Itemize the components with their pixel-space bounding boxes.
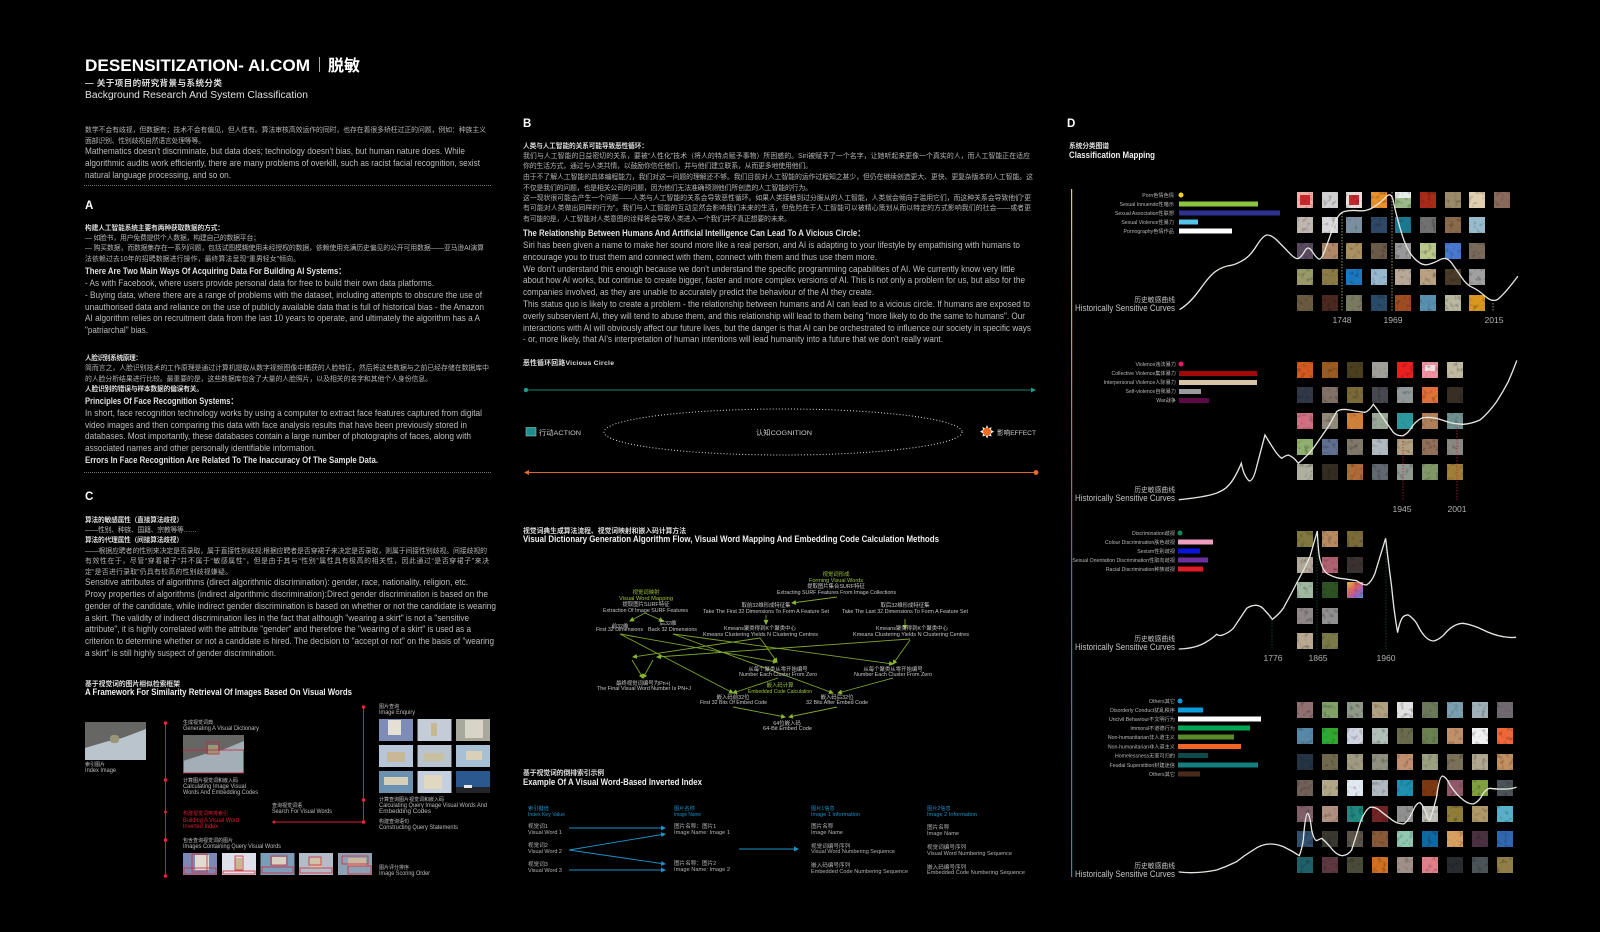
node: kmeans last: Kmeans聚类得到K个聚类中心 — [876, 624, 949, 632]
section B text: The Relationship Between Humans And Artificial Intelligence Can Lead To A Vicious Circle： — [523, 228, 865, 238]
curve: porn: Historically Sensitive Curves — [1075, 303, 1175, 313]
legend: others bars: Non-humanitarian非人道主义 — [1108, 742, 1175, 750]
curve: porn: 1969 — [1383, 315, 1403, 325]
legend: others bars: Others其它 — [1149, 770, 1175, 778]
image grid: discrimination — [1297, 531, 1363, 649]
section C text: criterion to determine whether or not a candidate is hired. The decision to "accept or not" on the basis of "wearing — [85, 636, 494, 646]
node: last 32 bits: 32 Bits After Embed Code — [806, 700, 868, 706]
face recognition text: In short, face recognition technology works by using a computer to extract face features captured from digital — [85, 408, 482, 418]
teal arrow — [524, 388, 1036, 392]
curve: porn: 历史敏感曲线 — [1134, 295, 1175, 304]
legend: discrimination bars: Colour Discrimination肤色歧视 — [1105, 538, 1175, 546]
section A text: — 如脸书，用户免费提供个人数据，构建自己的数据平台； — [85, 233, 260, 242]
curve: discrimination: 1865 — [1308, 653, 1328, 663]
node: kmeans last — [853, 624, 969, 638]
step: search for visual words: 查询视觉词语 — [272, 802, 302, 809]
face recognition text: 的人脸分析结果进行比较。最重要的是，这些数据库包含了大量的人脸照片，以及相关的名字和其他个人身份信息。 — [85, 374, 432, 383]
step: building inverted index: Building A Visual Word — [183, 817, 239, 824]
intro text: algorithmic audits work efficiently, there are many problems of overkill, such as racist facial recognition, sexist — [85, 158, 480, 168]
column: index key: 索引键值 — [528, 804, 549, 812]
curve: others: Historically Sensitive Curves — [1075, 869, 1175, 879]
heading: algorithm flow — [523, 526, 939, 544]
node: first 32 dimensions set — [703, 601, 829, 615]
column: image name: 图片名称：图片2 — [674, 859, 716, 867]
section B text: 有可能的是，人工智能对人类意图的诠释将会导致人类进入一个我们并不真正想要的未来。 — [523, 214, 791, 223]
column: image 1 information: Image 1 Information — [811, 812, 860, 818]
node: visual word mapping — [603, 588, 688, 614]
curve: discrimination: 历史敏感曲线 — [1134, 634, 1175, 643]
diagram: inverted index — [528, 804, 1025, 876]
node: first and back 32 dimensions: First 32 Dimensions — [596, 627, 643, 633]
section A text: 法依赖过去10年的招聘数据进行操作，最终算法呈现“重男轻女”倾向。 — [85, 254, 300, 263]
node: first 32 bits: First 32 Bits Of Embed Code — [700, 700, 767, 706]
heading: algorithm flow: Visual Dictionary Generation Algorithm Flow, Visual Word Mapping And Embedding Code Calculation Methods — [523, 534, 939, 544]
column: index key: Visual Word 1 — [528, 830, 562, 836]
section C text: ——性别、种族、国籍、宗教等等…… — [85, 525, 197, 534]
chart group: discrimination — [1072, 529, 1516, 663]
column: image 1 information: Visual Word Numbering Sequence — [811, 849, 895, 855]
step: search for visual words — [272, 802, 333, 815]
step: constructing query statements: Constructing Query Statements — [379, 824, 459, 831]
column: image 2 information: Visual Word Numbering Sequence — [927, 851, 1012, 857]
legend: violence bars: Interpersonal Violence人际暴力 — [1104, 378, 1176, 386]
section C text: a skirt" is still highly suspect of gender discrimination. — [85, 648, 276, 658]
step: image enquiry: Image Enquiry — [379, 709, 416, 716]
column: image name: 图片名称 — [674, 804, 695, 812]
node: first and back 32 dimensions: Back 32 Dimensions — [648, 627, 697, 633]
heading: section C: C — [85, 491, 93, 503]
node: visual word mapping: 视觉词映射 — [633, 588, 660, 596]
image grid: porn — [1297, 192, 1510, 311]
node: final visual word number: The Final Visual Word Number Is PN+J — [597, 686, 691, 692]
section A text: unauthorised data and reliance on the use of publicly available data that is full of historical bias - the Amazon — [85, 302, 484, 312]
chart group: porn — [1075, 191, 1518, 325]
legend: discrimination bars: Discrimination歧视 — [1132, 529, 1175, 537]
heading: vicious circle: 恶性循环回路Vicious Circle — [523, 358, 614, 367]
section B text: about how AI works, but continue to create bigger, faster and more complex versions of AI. This is not only a problem for us, but also for the — [523, 275, 1025, 285]
curve: violence: 1945 — [1392, 504, 1412, 514]
legend: discrimination bars — [1072, 529, 1213, 573]
column: index key: Visual Word 3 — [528, 868, 562, 874]
curve: discrimination — [1075, 531, 1516, 663]
section C text: 算法的代理属性（间接算法歧视） — [85, 535, 183, 544]
index image: Index Image — [85, 767, 116, 774]
legend: violence bars: War战争 — [1156, 396, 1176, 404]
curve: others: 历史敏感曲线 — [1134, 861, 1175, 870]
heading: classification mapping: 系统分类图谱 — [1069, 141, 1109, 150]
step: building inverted index: Inverted Index — [183, 823, 219, 830]
section A text: AI algorithm relies on recruitment data from the last 10 years to operate, and ultimately the algorithm has a A — [85, 313, 481, 323]
curve: discrimination: 1776 — [1263, 653, 1283, 663]
column: image 1 information: Embedded Code Numbering Sequence — [811, 869, 908, 875]
step: calculating query words: 计算查询图片视觉词和嵌入码 — [379, 796, 444, 803]
section B text: 我们与人工智能的日益密切的关系，要被“人性化”技术（将人的特点赋予事物）所困惑的。Siri被赋予了一个名字，让她听起来更像一个真实的人，而人工智能正在适应 — [523, 151, 1030, 160]
legend: violence bars: Violence违法暴力 — [1135, 360, 1176, 368]
face recognition text — [85, 353, 489, 465]
flow arrows — [620, 597, 910, 717]
subtitle: — 关于项目的研究背景与系统分类 — [85, 77, 222, 88]
legend: others bars — [1108, 697, 1261, 778]
legend: porn bars: Sexual Innuendo性暗示 — [1119, 200, 1174, 208]
heading: inverted index: 基于视觉词的倒排索引示例 — [523, 768, 604, 777]
index image — [85, 722, 146, 774]
intro text: 面部识别、性别歧视自然语言处理等等。 — [85, 136, 205, 145]
curve: porn: 1748 — [1332, 315, 1352, 325]
section C text: a skirt. The validity of indirect discrimination lies in the fact that although "wearing a skirt" is not a "sensitive — [85, 613, 469, 623]
node: 64 bit code: 64-Bit Embed Code — [763, 726, 812, 732]
legend: others bars: Feudal Superstition封建迷信 — [1110, 761, 1175, 769]
section B text: We don't understand this enough because we don't understand the specific programming capabilities of AI. We currently know very little — [523, 264, 1015, 274]
section B text: 你的生活方式，通过与人类共情，以鼓励你信任他们，并与他们建立联系，从而更多地使用他们。 — [523, 161, 812, 170]
step: image enquiry — [379, 703, 490, 793]
column: image 2 information: 嵌入码编号序列 — [927, 863, 967, 871]
step: calculating query words — [379, 796, 487, 815]
cognition ellipse: 认知COGNITION — [756, 428, 812, 437]
step: image enquiry: 图片查询 — [379, 703, 399, 710]
column: image name: Image Name: Image 1 — [674, 830, 730, 836]
image grid: violence — [1297, 362, 1463, 480]
intro text — [85, 125, 486, 180]
section A text: - Buying data, where there are a range of problems with the dataset, including attempts to obscure the use of — [85, 290, 482, 300]
column: image 1 information: 图片1信息 — [811, 804, 835, 812]
node: number clusters left: Number Each Cluster From Zero — [739, 672, 817, 678]
node: forming visual words: Extracting SURF Features From Image Collections — [777, 590, 896, 596]
node: visual word mapping: Extraction Of Image SURF Features — [603, 608, 688, 614]
node: first and back 32 dimensions: 后32维 — [660, 619, 677, 627]
node: number clusters left — [739, 665, 817, 678]
legend: others bars: Non-humanitarian非人道主义 — [1108, 733, 1175, 741]
node: embedded code calculation — [748, 681, 812, 695]
face recognition text: 简而言之，人脸识别技术的工作原理是通过计算机提取从数字视频图像中捕获的人脸特征，然后将这些数据与之前已经存储在数据库中 — [85, 363, 489, 372]
node: last 32 bits — [806, 693, 868, 706]
section B text: 这一现状很可能会产生一个问题——人类与人工智能的关系会导致恶性循环。如果人类接触到过分服从的人工智能，人类就会倾向于滥用它们，而这种关系会导致他们“更 — [523, 193, 1031, 202]
section A text: — 购买数据，而数据集存在一系列问题，包括试图模糊使用未经授权的数据，依赖使用充满历史偏见的公开可用数据——亚马逊AI演算 — [85, 243, 484, 252]
intro text: 数学不会有歧视，但数据有；技术不会有偏见，但人性有。算法审核高效运作的同时，也存在着很多矫枉过正的问题，例如：种族主义 — [85, 125, 486, 134]
face recognition text: associated names and other personally identifiable information. — [85, 443, 316, 453]
scoring image row — [183, 853, 431, 877]
step: calculating visual words — [183, 777, 259, 796]
node: 64 bit code: 64位嵌入码 — [773, 719, 801, 727]
curve: violence: 2001 — [1447, 504, 1467, 514]
step: calculating visual words: 计算图片视觉词和嵌入码 — [183, 777, 238, 784]
node: kmeans last: Kmeans Clustering Yields N Clustering Centres — [853, 632, 969, 638]
step: calculating visual words: Words And Embedding Codes — [183, 789, 259, 796]
heading: algorithm flow: 视觉词典生成算法流程、视觉词映射和嵌入码计算方法 — [523, 526, 686, 535]
effect label — [980, 425, 1036, 438]
legend: porn bars: Porn色情色情 — [1142, 191, 1174, 199]
curve: violence: 历史敏感曲线 — [1134, 485, 1175, 494]
section B text: 人类与人工智能的关系可能导致恶性循环： — [523, 141, 648, 150]
image grid: others — [1297, 702, 1513, 873]
section C text: 算法的敏感属性（直接算法歧视） — [85, 515, 183, 524]
red timeline left — [164, 721, 167, 878]
step: images containing query visual words — [183, 837, 282, 850]
title: DESENSITIZATION- AI.COM — [85, 57, 310, 75]
column: image 1 information — [811, 804, 908, 875]
legend: violence bars — [1104, 360, 1257, 404]
diagram: vicious circle — [524, 388, 1038, 475]
section B text: overly subservient AI, they will tend to abuse them, and this relationship will lead to them being "more likely to do the same to humans". Our — [523, 311, 1025, 321]
step: constructing query statements: 构建查询语句 — [379, 818, 409, 825]
curve: discrimination: 1960 — [1376, 653, 1396, 663]
diagram: similarity retrieval framework — [85, 703, 490, 878]
node: first 32 bits: 嵌入码前32位 — [717, 693, 750, 701]
node: kmeans first: Kmeans聚类得到K个聚类中心 — [724, 624, 797, 632]
legend: others bars: Others其它 — [1149, 697, 1175, 705]
subtitle — [85, 77, 308, 101]
legend: porn bars: Pornography色情作品 — [1124, 227, 1174, 235]
legend: others bars: Disorderly Conduct扰乱秩序 — [1110, 706, 1175, 714]
section B text: This status quo is likely to create a problem - the relationship between humans and AI can lead to a vicious circle. If humans are exposed to — [523, 299, 1030, 309]
legend: others bars: Uncivil Behaviour不文明行为 — [1109, 715, 1175, 723]
step: calculating query words: Embedding Codes — [379, 808, 432, 815]
column: image name — [674, 804, 730, 873]
section C text: attribute", it is highly correlated with the attribute "gender" and therefore the "wearing of a skirt" is used as a — [85, 624, 472, 634]
column: index key: 视觉词2 — [528, 841, 548, 849]
red query path — [272, 705, 365, 824]
node: number clusters right: 从每个聚类从零开始编号 — [863, 665, 923, 673]
column: image name: Image Name — [674, 812, 701, 818]
node: visual word mapping: Visual Word Mapping — [619, 596, 673, 602]
node: number clusters right: Number Each Cluster From Zero — [854, 672, 932, 678]
section B text: 由于不了解人工智能的具体编程能力，我们对这一问题的理解还不够。我们目前对人工智能的运作过程知之甚少，但仍在继续创造更大、更快、更复杂版本的人工智能。这 — [523, 172, 1033, 181]
node: visual word mapping: 提取图片SURF特征 — [622, 600, 670, 608]
node: first and back 32 dimensions: 前32维 — [612, 622, 629, 630]
face recognition text: databases. Most importantly, these databases contain a large number of photographs of faces, along with — [85, 431, 471, 441]
node: final visual word number — [597, 679, 691, 692]
column: index key: Index Key Value — [528, 812, 565, 818]
column: image name: Image Name: Image 2 — [674, 867, 730, 873]
node: forming visual words — [777, 570, 896, 596]
action label: 行动ACTION — [539, 428, 581, 437]
section B text: - or, more likely, that AI's interpretation of human intentions will lead humanity into a future that we don't really want. — [523, 334, 943, 344]
face recognition text: 人脸识别系统原理： — [85, 353, 142, 362]
heading: inverted index: Example Of A Visual Word-Based Inverted Index — [523, 777, 702, 787]
node: number clusters right — [854, 665, 932, 678]
section A text: "patriarchal" bias. — [85, 325, 148, 335]
section C text — [85, 515, 496, 658]
section B text: companies involved, as they are unable to accurately predict the behaviour of the AI they create. — [523, 287, 874, 297]
step: generating a visual dictionary: 生成视觉词典 — [183, 719, 213, 726]
column: image 1 information: 视觉词编号序列 — [811, 842, 851, 850]
node: first 32 bits — [700, 693, 767, 706]
section B text: encourage you to trust them and connect with them, connect with them and thus use them more. — [523, 252, 877, 262]
section A text: There Are Two Main Ways Of Acquiring Data For Building AI Systems： — [85, 266, 346, 276]
heading: section D: D — [1067, 118, 1075, 130]
section B text: Siri has been given a name to make her sound more like a real person, and AI is adapting to your lifestyle by empathising with humans to — [523, 240, 1020, 250]
cognition ellipse — [604, 409, 962, 455]
section A text: 构建人工智能系统主要有两种获取数据的方式： — [85, 223, 224, 232]
title: 脱敏 — [328, 57, 360, 75]
face recognition text: Principles Of Face Recognition Systems： — [85, 396, 238, 406]
step: building inverted index: 构建视觉词倒排索引 — [183, 810, 228, 817]
column: index key: 视觉词1 — [528, 822, 548, 830]
section B text — [523, 141, 1033, 344]
heading: retrieval framework: A Framework For Similarity Retrieval Of Images Based On Visual Words — [85, 687, 352, 697]
heading: section B: B — [523, 118, 531, 130]
node: last 32 dimensions set: 取后32维形成特征集 — [880, 601, 930, 609]
node: first 32 dimensions set: 取前32维形成特征集 — [741, 601, 791, 609]
section B text: interactions with AI will obviously affect our future lives, but the danger is that AI can be orchestrated to influence our society in specific ways — [523, 323, 1031, 333]
intro text: Mathematics doesn't discriminate, but data does; technology doesn't bias, but human nature does. While — [85, 146, 465, 156]
heading: retrieval framework — [85, 679, 352, 697]
chart group: violence — [1075, 360, 1517, 514]
subtitle: Background Research And System Classification — [85, 90, 308, 101]
column: image 1 information: Image Name — [811, 830, 843, 836]
node: 64 bit code — [763, 719, 812, 732]
column: image 2 information: Image 2 Information — [927, 812, 977, 818]
column: image 1 information: 图片名称 — [811, 822, 834, 830]
column: image name: 图片名称：图片1 — [674, 822, 716, 830]
node: embedded code calculation: Embedded Code Calculation — [748, 689, 812, 695]
node: kmeans first: Kmeans Clustering Yields N Clustering Centres — [703, 632, 818, 638]
scoring image row: Image Scoring Order — [379, 870, 431, 877]
section B text: 有可能对人类做出同样的行为”。我们与人工智能的互动显然会影响我们未来的生活，但危险在于人工智能可以被精心策划从而以特定的方式影响我们的社会——或者更 — [523, 203, 1031, 212]
legend: discrimination bars: Sexism性别歧视 — [1137, 547, 1175, 555]
legend: porn bars: Sexual Association性联想 — [1115, 209, 1174, 217]
heading: section A: A — [85, 200, 93, 212]
section C text: gender of the candidate, while indirect gender discrimination is based on whether or not the candidate is wearing — [85, 601, 496, 611]
chart group: others — [1075, 697, 1516, 879]
section C text: ——根据应聘者的性别来决定是否录取，属于直接性别歧视;根据应聘者是否穿裙子来决定是否录取，则属于间接性别歧视。间接歧视的 — [85, 546, 487, 555]
column: index key — [528, 804, 565, 874]
index arrows — [569, 828, 798, 870]
legend: others bars: Immoral不道德行为 — [1130, 724, 1175, 732]
curve: violence: Historically Sensitive Curves — [1075, 493, 1175, 503]
column: image 2 information — [927, 804, 1025, 876]
curve: porn: 2015 — [1484, 315, 1504, 325]
column: image 2 information: 视觉词编号序列 — [927, 843, 967, 851]
step: generating a visual dictionary — [183, 719, 260, 773]
step: building inverted index — [183, 810, 239, 830]
face recognition text: Errors In Face Recognition Are Related To The Inaccuracy Of The Sample Data. — [85, 455, 378, 465]
legend: discrimination bars: Sexual Orientation Discrimination性取向歧视 — [1072, 556, 1175, 564]
column: image 2 information: 图片2信息 — [927, 804, 951, 812]
section A text: - As with Facebook, where users provide personal data for free to build their own data platforms. — [85, 278, 434, 288]
column: image 2 information: Image Name — [927, 831, 959, 837]
column: index key: Visual Word 2 — [528, 849, 562, 855]
scoring image row: 图片评分排序 — [379, 864, 409, 871]
action label — [526, 428, 581, 437]
column: index key: 视觉词3 — [528, 860, 548, 868]
node: first 32 dimensions set: Take The First 32 Dimensions To Form A Feature Set — [703, 609, 829, 615]
node: forming visual words: 提取图片集合SURF特征 — [807, 582, 866, 590]
legend: discrimination bars: Racial Discrimination种族歧视 — [1106, 565, 1175, 573]
column: image 2 information: 图片名称 — [927, 823, 950, 831]
step: generating a visual dictionary: Generating A Visual Dictionary — [183, 725, 260, 732]
node: final visual word number: 最终视觉词编号为Pn+j — [616, 679, 670, 687]
step: constructing query statements — [379, 818, 459, 831]
column: image 2 information: Embedded Code Numbering Sequence — [927, 870, 1025, 876]
legend: porn bars: Sexual Violence性暴力 — [1121, 218, 1174, 226]
flowchart: visual word algorithm — [596, 570, 969, 732]
step: images containing query visual words: Images Containing Query Visual Words — [183, 843, 282, 850]
node: forming visual words: Forming Visual Words — [809, 578, 863, 584]
index image: 索引图片 — [85, 761, 105, 768]
intro text: natural language processing, and so on. — [85, 170, 231, 180]
legend: porn bars — [1115, 191, 1280, 235]
curve: violence — [1075, 361, 1517, 514]
section C text: Sensitive attributes of algorithms (direct algorithmic discrimination): gender, race, nationality, religion, etc. — [85, 577, 468, 587]
section B text: 不仅是我们的问题，也是相关公司的问题，因为他们无法准确预测他们所创造的人工智能的行为。 — [523, 183, 812, 192]
node: number clusters left: 从每个聚类从零开始编号 — [748, 665, 808, 673]
node: last 32 bits: 嵌入码后32位 — [821, 693, 854, 701]
curve: others — [1075, 776, 1516, 879]
step: calculating visual words: Calculating Image Visual — [183, 783, 246, 790]
node: first and back 32 dimensions — [596, 619, 697, 633]
curve: discrimination: Historically Sensitive Curves — [1075, 642, 1175, 652]
section A text — [85, 223, 484, 335]
node: forming visual words: 视觉词形成 — [823, 570, 850, 578]
heading: retrieval framework: 基于视觉词的图片相似检索框架 — [85, 679, 180, 688]
vertical gradient axis — [1071, 189, 1072, 877]
section C text: Proxy properties of algorithms (indirect algorithmic discrimination):Direct gender discrimination is based on the — [85, 589, 488, 599]
heading: classification mapping: Classification Mapping — [1069, 150, 1155, 160]
node: last 32 dimensions set — [842, 601, 968, 615]
curve: porn — [1075, 192, 1518, 325]
face recognition text: video images and then comparing this data with face analysis results that have been previously stored in — [85, 420, 467, 430]
effect label: 影响EFFECT — [997, 428, 1036, 437]
legend: violence bars: Self-violence自我暴力 — [1126, 387, 1176, 395]
section C text: 有效性在于，尽管“穿着裙子”并不属于“敏感属性”，但是由于其与“性别”属性具有极高的相关性，因此通过“是否穿裙子”来决 — [85, 556, 489, 565]
orange arrow — [524, 470, 1038, 475]
node: kmeans first — [703, 624, 818, 638]
heading: inverted index — [523, 768, 702, 787]
step: images containing query visual words: 包含查询视觉词的图片 — [183, 837, 233, 844]
face recognition text: 人脸识别的错误与样本数据的偏误有关。 — [85, 384, 203, 393]
step: search for visual words: Search For Visual Words — [272, 808, 333, 815]
node: last 32 dimensions set: Take The Last 32 Dimensions To Form A Feature Set — [842, 609, 968, 615]
node: embedded code calculation: 嵌入码计算 — [767, 681, 794, 689]
column: image 1 information: 嵌入码编号序列 — [811, 861, 851, 869]
step: calculating query words: Calculating Query Image Visual Words And — [379, 802, 487, 809]
legend: violence bars: Collective Violence集体暴力 — [1112, 369, 1176, 377]
legend: others bars: Homelessness无家可归的 — [1115, 752, 1175, 760]
heading: classification mapping — [1069, 141, 1155, 160]
section C text: 定“是否进行录取”仍具有较高的性别歧视嫌疑。 — [85, 567, 232, 576]
